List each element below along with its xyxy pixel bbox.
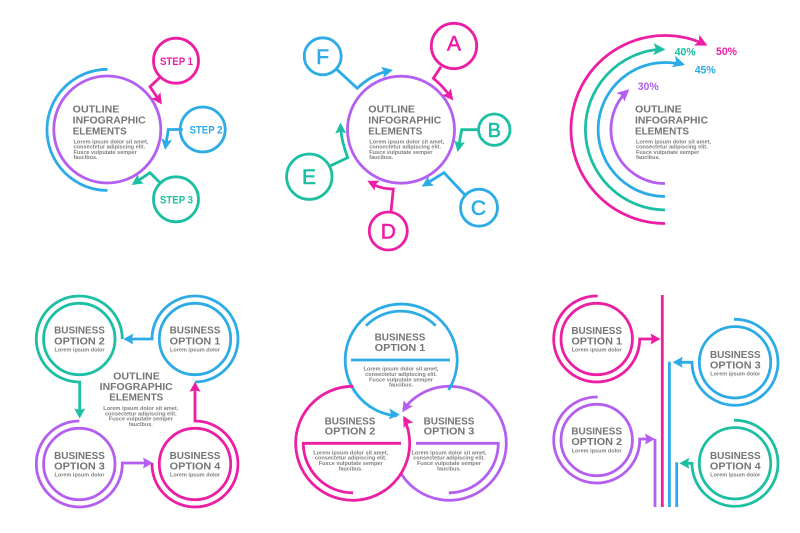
body text: Lorem ipsum dolor sit amet, [369, 139, 445, 145]
label 40%: 40% [675, 47, 696, 59]
center body text: Lorem ipsum dolor sit amet, [103, 406, 179, 412]
option 1: Lorem ipsum dolor [170, 348, 221, 354]
step 1: STEP 1 [160, 56, 193, 68]
option 3 [36, 421, 153, 507]
panel: percentage arcs [571, 35, 738, 223]
option 2 [554, 397, 655, 483]
option 2 text: Fusce vulputate semper [319, 461, 383, 467]
option 3 text [412, 416, 487, 473]
option 3 text: OPTION 3 [424, 426, 475, 438]
central purple circle [54, 76, 161, 183]
option 3 text: Lorem ipsum dolor sit amet, [412, 450, 487, 456]
option 1: Lorem ipsum dolor [572, 348, 622, 354]
option 3: OPTION 3 [710, 360, 761, 371]
option C: C [471, 197, 486, 220]
option 3: OPTION 3 [54, 461, 105, 472]
body text: faucibus. [369, 155, 394, 161]
option 4: OPTION 4 [710, 461, 761, 472]
option 1 text: Lorem ipsum dolor sit amet, [364, 367, 439, 373]
heading: OUTLINE [368, 105, 415, 116]
option 1: BUSINESS [571, 326, 622, 337]
panel: four option cycle [36, 296, 238, 507]
option 3: Lorem ipsum dolor [54, 473, 105, 479]
option 1 text: faucibus. [389, 383, 413, 389]
option 2 text: Lorem ipsum dolor sit amet, [313, 450, 389, 456]
center body text: Fusce vulputate semper [109, 417, 174, 423]
label 30%: 30% [638, 81, 659, 93]
option 2: BUSINESS [54, 326, 105, 337]
option 3 [673, 319, 778, 405]
heading [73, 105, 146, 137]
option 4 [679, 420, 778, 506]
option 3 text: faucibus. [437, 467, 461, 473]
body text: faucibus. [636, 155, 660, 161]
option 2 text: faucibus. [339, 467, 363, 473]
step 2 [160, 107, 225, 152]
heading: OUTLINE [635, 105, 682, 116]
option 2 [36, 296, 122, 418]
option 4: OPTION 4 [170, 461, 221, 472]
option 1 [123, 296, 238, 382]
option 2: Lorem ipsum dolor [54, 348, 105, 354]
panel: three overlapping circles [296, 304, 506, 500]
option 1 [554, 296, 660, 382]
option B: B [488, 120, 501, 142]
heading: ELEMENTS [368, 126, 422, 137]
option 2: Lorem ipsum dolor [572, 448, 622, 454]
body text [369, 139, 445, 161]
option 2 text: OPTION 2 [325, 426, 376, 438]
arc 40% [585, 43, 666, 210]
body text: Fusce vulputate semper [636, 150, 700, 156]
heading: INFOGRAPHIC [635, 116, 708, 127]
body text: consectetur adipiscing elit. [74, 144, 146, 150]
option 3 text: Fusce vulputate semper [417, 461, 482, 467]
heading [635, 105, 708, 137]
arc 30% [611, 85, 665, 184]
option 4: Lorem ipsum dolor [170, 473, 221, 479]
option 1 text [364, 333, 439, 389]
pink vertical line [661, 295, 664, 507]
option F: F [316, 46, 329, 69]
option 3: Lorem ipsum dolor [710, 372, 761, 378]
heading: ELEMENTS [73, 126, 127, 137]
pink circle [296, 386, 413, 500]
heading: OUTLINE [73, 105, 119, 116]
option B [452, 114, 510, 153]
blue vertical lines [669, 362, 677, 507]
option 2: OPTION 2 [54, 336, 105, 347]
option 2: BUSINESS [571, 427, 622, 438]
body text: faucibus. [74, 155, 98, 161]
center heading: ELEMENTS [109, 393, 163, 404]
heading: ELEMENTS [635, 126, 689, 137]
body text: Fusce vulputate semper [74, 150, 138, 156]
option A [431, 23, 477, 104]
outer blue arc [47, 69, 108, 190]
option 2 text: consectetur adipiscing elit. [315, 456, 387, 462]
option 1: OPTION 1 [170, 336, 221, 347]
label 50%: 50% [716, 46, 738, 58]
center body text: faucibus. [129, 422, 153, 428]
purple vertical line [654, 439, 656, 507]
heading: INFOGRAPHIC [368, 116, 442, 127]
arc 45% [598, 56, 687, 197]
option 2 text: BUSINESS [325, 416, 375, 427]
center heading: INFOGRAPHIC [100, 382, 173, 393]
option D [365, 176, 407, 250]
option D: D [381, 220, 396, 243]
option 3 text: consectetur adipiscing elit. [413, 456, 485, 462]
panel: options on vertical lines [554, 295, 778, 507]
option F [304, 38, 394, 88]
option 3: BUSINESS [54, 451, 105, 462]
option 4: Lorem ipsum dolor [710, 473, 761, 479]
option A: A [447, 33, 461, 56]
body text [636, 139, 711, 161]
step 1 [150, 38, 198, 108]
option 4 [152, 382, 238, 507]
option 1: OPTION 1 [571, 336, 622, 347]
center body text [103, 406, 179, 428]
center heading [100, 371, 173, 404]
option 1 text: Fusce vulputate semper [369, 377, 434, 383]
body text: Lorem ipsum dolor sit amet, [636, 139, 711, 145]
label 45%: 45% [695, 64, 716, 76]
panel: three steps [47, 38, 225, 222]
option C [419, 173, 498, 226]
panel: six letters [287, 23, 510, 250]
blue circle [345, 304, 457, 420]
center heading: OUTLINE [113, 371, 160, 382]
option 2 text [313, 416, 389, 473]
body text: consectetur adipiscing elit. [369, 144, 441, 150]
heading: INFOGRAPHIC [73, 116, 146, 127]
option 2: OPTION 2 [571, 437, 622, 448]
step 2: STEP 2 [190, 124, 223, 136]
step 3: STEP 3 [160, 194, 193, 206]
option 1 text: BUSINESS [375, 333, 425, 344]
option 3 text: BUSINESS [424, 416, 474, 427]
option 3: BUSINESS [710, 350, 761, 361]
purple circle [398, 386, 506, 500]
option 1: BUSINESS [170, 326, 220, 337]
body text [74, 139, 149, 161]
option 1 text: OPTION 1 [375, 343, 426, 354]
central purple circle [348, 76, 454, 183]
body text: Lorem ipsum dolor sit amet, [74, 139, 149, 145]
option 4: BUSINESS [710, 451, 761, 462]
body text: Fusce vulputate semper [369, 150, 433, 156]
option E: E [302, 166, 316, 189]
body text: consectetur adipiscing elit. [636, 144, 708, 150]
center body text: consectetur adipiscing elit. [105, 411, 177, 417]
arc 50% [571, 35, 710, 223]
option 4: BUSINESS [170, 451, 220, 462]
step 3 [129, 173, 198, 222]
option E [287, 122, 348, 199]
option 1 text: consectetur adipiscing elit. [365, 372, 437, 378]
heading [368, 105, 442, 137]
